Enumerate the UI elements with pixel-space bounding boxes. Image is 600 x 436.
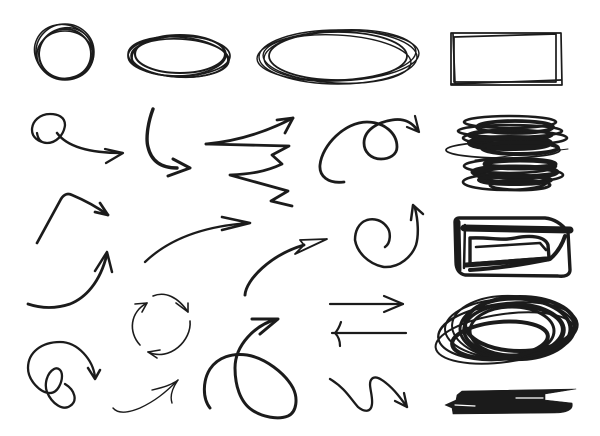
arrow: thin sweep <box>113 380 178 412</box>
arrow: long curve <box>145 217 250 262</box>
cycle arrows <box>132 294 190 358</box>
arrow: bent <box>37 194 108 243</box>
rectangle scribble <box>455 218 570 276</box>
arrow: big loop <box>204 319 296 418</box>
oval scribble <box>432 293 581 372</box>
arrow: hooked down right <box>147 109 190 176</box>
arrow: right <box>330 296 403 312</box>
arrow: loop with tail <box>32 114 123 163</box>
arrow: curl with loop <box>320 116 419 182</box>
sketched rectangle <box>451 33 562 85</box>
arrow: curve with open head <box>245 239 327 295</box>
arrow: loop and swirl <box>28 342 100 408</box>
sketched oval <box>127 34 230 80</box>
arrow: zigzag <box>206 118 293 206</box>
wide sketched oval <box>256 26 420 87</box>
solid smear <box>445 389 576 414</box>
arrow: rising curve <box>28 252 112 307</box>
sketched circle <box>25 15 103 89</box>
arrow: wavy <box>330 377 407 411</box>
arrow: left <box>332 322 406 346</box>
arrow: spiral <box>355 205 423 267</box>
scribble block <box>446 116 568 190</box>
